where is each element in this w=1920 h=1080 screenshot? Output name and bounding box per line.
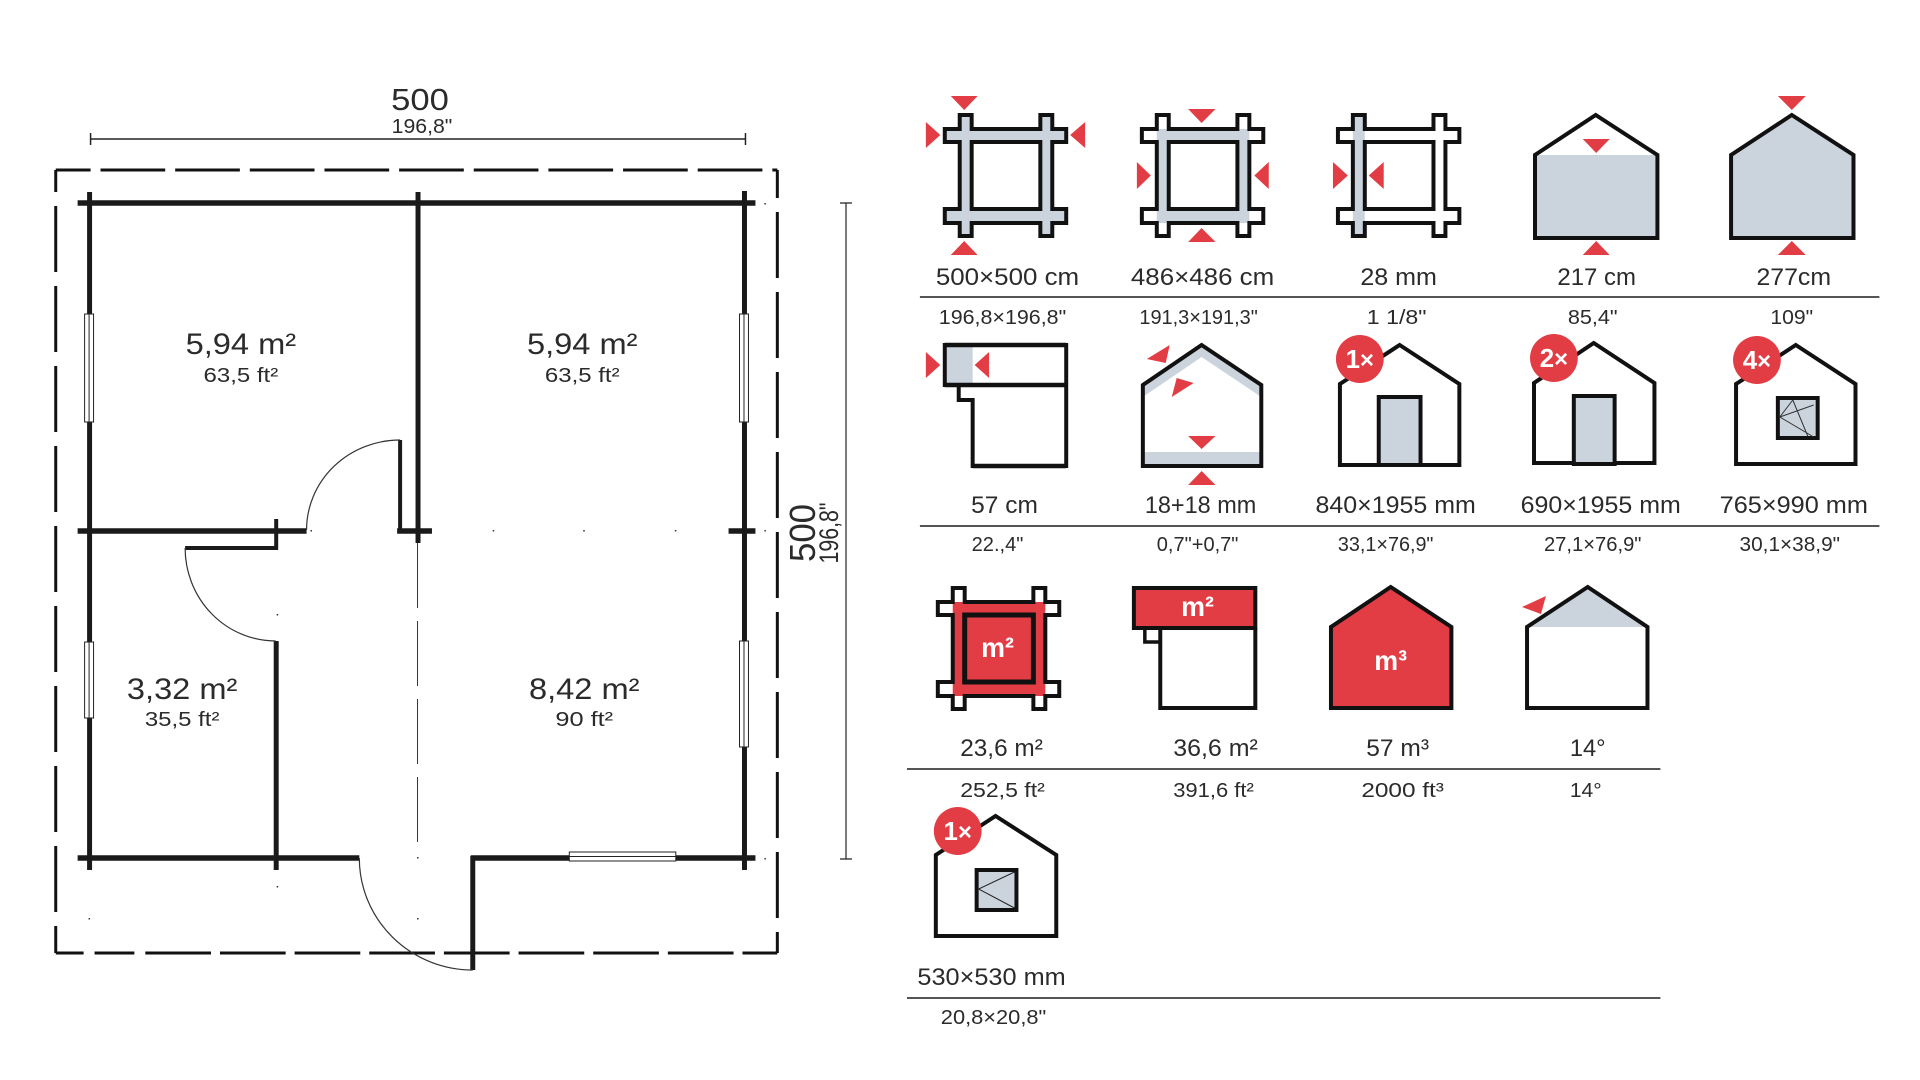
icon: roof pitch [1522, 587, 1647, 708]
icon: wall thickness [1333, 115, 1459, 236]
labels: row 2: 57 cm [971, 492, 1038, 519]
labels: row 2 [920, 492, 1879, 556]
labels: row 1 [920, 264, 1879, 329]
top dimension: 500 [391, 82, 449, 117]
icon: floor area: m² [981, 632, 1014, 663]
icon: ridge height [1731, 96, 1853, 255]
icon: interior doors [1530, 334, 1654, 464]
panel: row 3 specifications [907, 587, 1660, 802]
icon: windows: 4× [1743, 347, 1771, 375]
labels: row 3: 57 m³ [1366, 735, 1429, 762]
side dimension: 500 [782, 504, 823, 562]
labels: row 2: 690×1955 mm [1521, 492, 1681, 519]
room label: top left: 5,94 m² [186, 328, 296, 361]
labels: row 2: 30,1×38,9" [1740, 534, 1840, 556]
labels: row 1: 191,3×191,3" [1139, 307, 1258, 329]
labels: row 3: 2000 ft³ [1361, 780, 1444, 802]
labels: row 2: 0,7"+0,7" [1157, 534, 1238, 556]
panel: row 2 specifications [920, 334, 1879, 556]
icon: interior doors: 2× [1540, 345, 1568, 373]
room label: bottom left: 35,5 ft² [145, 709, 220, 731]
icon: roof area: m² [1181, 591, 1214, 622]
icon: main door [1336, 335, 1459, 465]
labels: row 3: 252,5 ft² [960, 780, 1045, 802]
icon: volume [1331, 587, 1451, 708]
icon: windows [1733, 336, 1855, 464]
windows [85, 314, 748, 861]
labels: row 2: 27,1×76,9" [1544, 534, 1641, 556]
labels: row 3 [907, 735, 1660, 802]
room label: bottom left: 3,32 m² [127, 673, 237, 706]
icon: wall height [1535, 115, 1657, 255]
labels: row 1: 1 1/8" [1367, 307, 1427, 329]
labels: row 1: 500×500 cm [936, 264, 1079, 291]
room label: top right [527, 328, 638, 387]
icon: volume: m³ [1374, 645, 1407, 676]
survey dots [89, 203, 766, 920]
thin centre line [417, 543, 419, 843]
labels: row 3: 14° [1570, 735, 1606, 762]
labels: row 2: 765×990 mm [1720, 492, 1868, 519]
side dimension [782, 203, 852, 859]
walls [78, 191, 755, 970]
icon: inner wall dimensions [1137, 109, 1269, 242]
room label: top left [186, 328, 296, 387]
icon: main door: 1× [1346, 346, 1374, 374]
labels: row 1: 109" [1770, 307, 1813, 329]
icon: floor area [938, 588, 1059, 709]
icon: roof overhang [926, 345, 1066, 466]
labels: row 3: 36,6 m² [1173, 735, 1258, 762]
labels: row 4 [907, 964, 1660, 1029]
labels: row 1: 28 mm [1360, 264, 1437, 291]
labels: row 1: 85,4" [1568, 307, 1618, 329]
labels: row 2: 18+18 mm [1145, 492, 1256, 519]
icon: roof and floor thickness [1143, 345, 1261, 485]
panel: row 1 specifications [920, 96, 1879, 329]
top dimension [91, 82, 745, 145]
room label: bottom left [127, 673, 237, 731]
side dimension: 196,8" [814, 503, 844, 563]
panel: floor plan [56, 82, 852, 970]
labels: row 4: 20,8×20,8" [941, 1007, 1046, 1029]
labels: row 1: 196,8×196,8" [939, 307, 1066, 329]
panel: row 4 specifications [907, 807, 1660, 1029]
labels: row 2: 840×1955 mm [1316, 492, 1476, 519]
labels: row 2: 33,1×76,9" [1338, 534, 1433, 556]
room label: top left: 63,5 ft² [204, 365, 279, 387]
room label: top right: 5,94 m² [527, 328, 638, 361]
terrace dashed outline [56, 170, 777, 953]
icon: outer wall dimensions [926, 96, 1085, 255]
room label: bottom right: 90 ft² [555, 709, 614, 731]
icon: roof area [1134, 588, 1255, 708]
labels: row 1: 217 cm [1557, 264, 1636, 291]
labels: row 1: 486×486 cm [1131, 264, 1274, 291]
labels: row 3: 14° [1570, 780, 1602, 802]
labels: row 3: 391,6 ft² [1173, 780, 1254, 802]
icon: roof window [934, 807, 1056, 936]
room label: bottom right [529, 673, 640, 731]
icon: roof window: 1× [944, 818, 972, 846]
room label: bottom right: 8,42 m² [529, 673, 640, 706]
room label: top right: 63,5 ft² [545, 365, 620, 387]
labels: row 4: 530×530 mm [917, 964, 1066, 991]
labels: row 1: 277cm [1756, 264, 1831, 291]
labels: row 2: 22.,4" [972, 534, 1023, 556]
door swings [185, 440, 473, 970]
labels: row 3: 23,6 m² [960, 735, 1043, 762]
top dimension: 196,8" [392, 116, 452, 138]
